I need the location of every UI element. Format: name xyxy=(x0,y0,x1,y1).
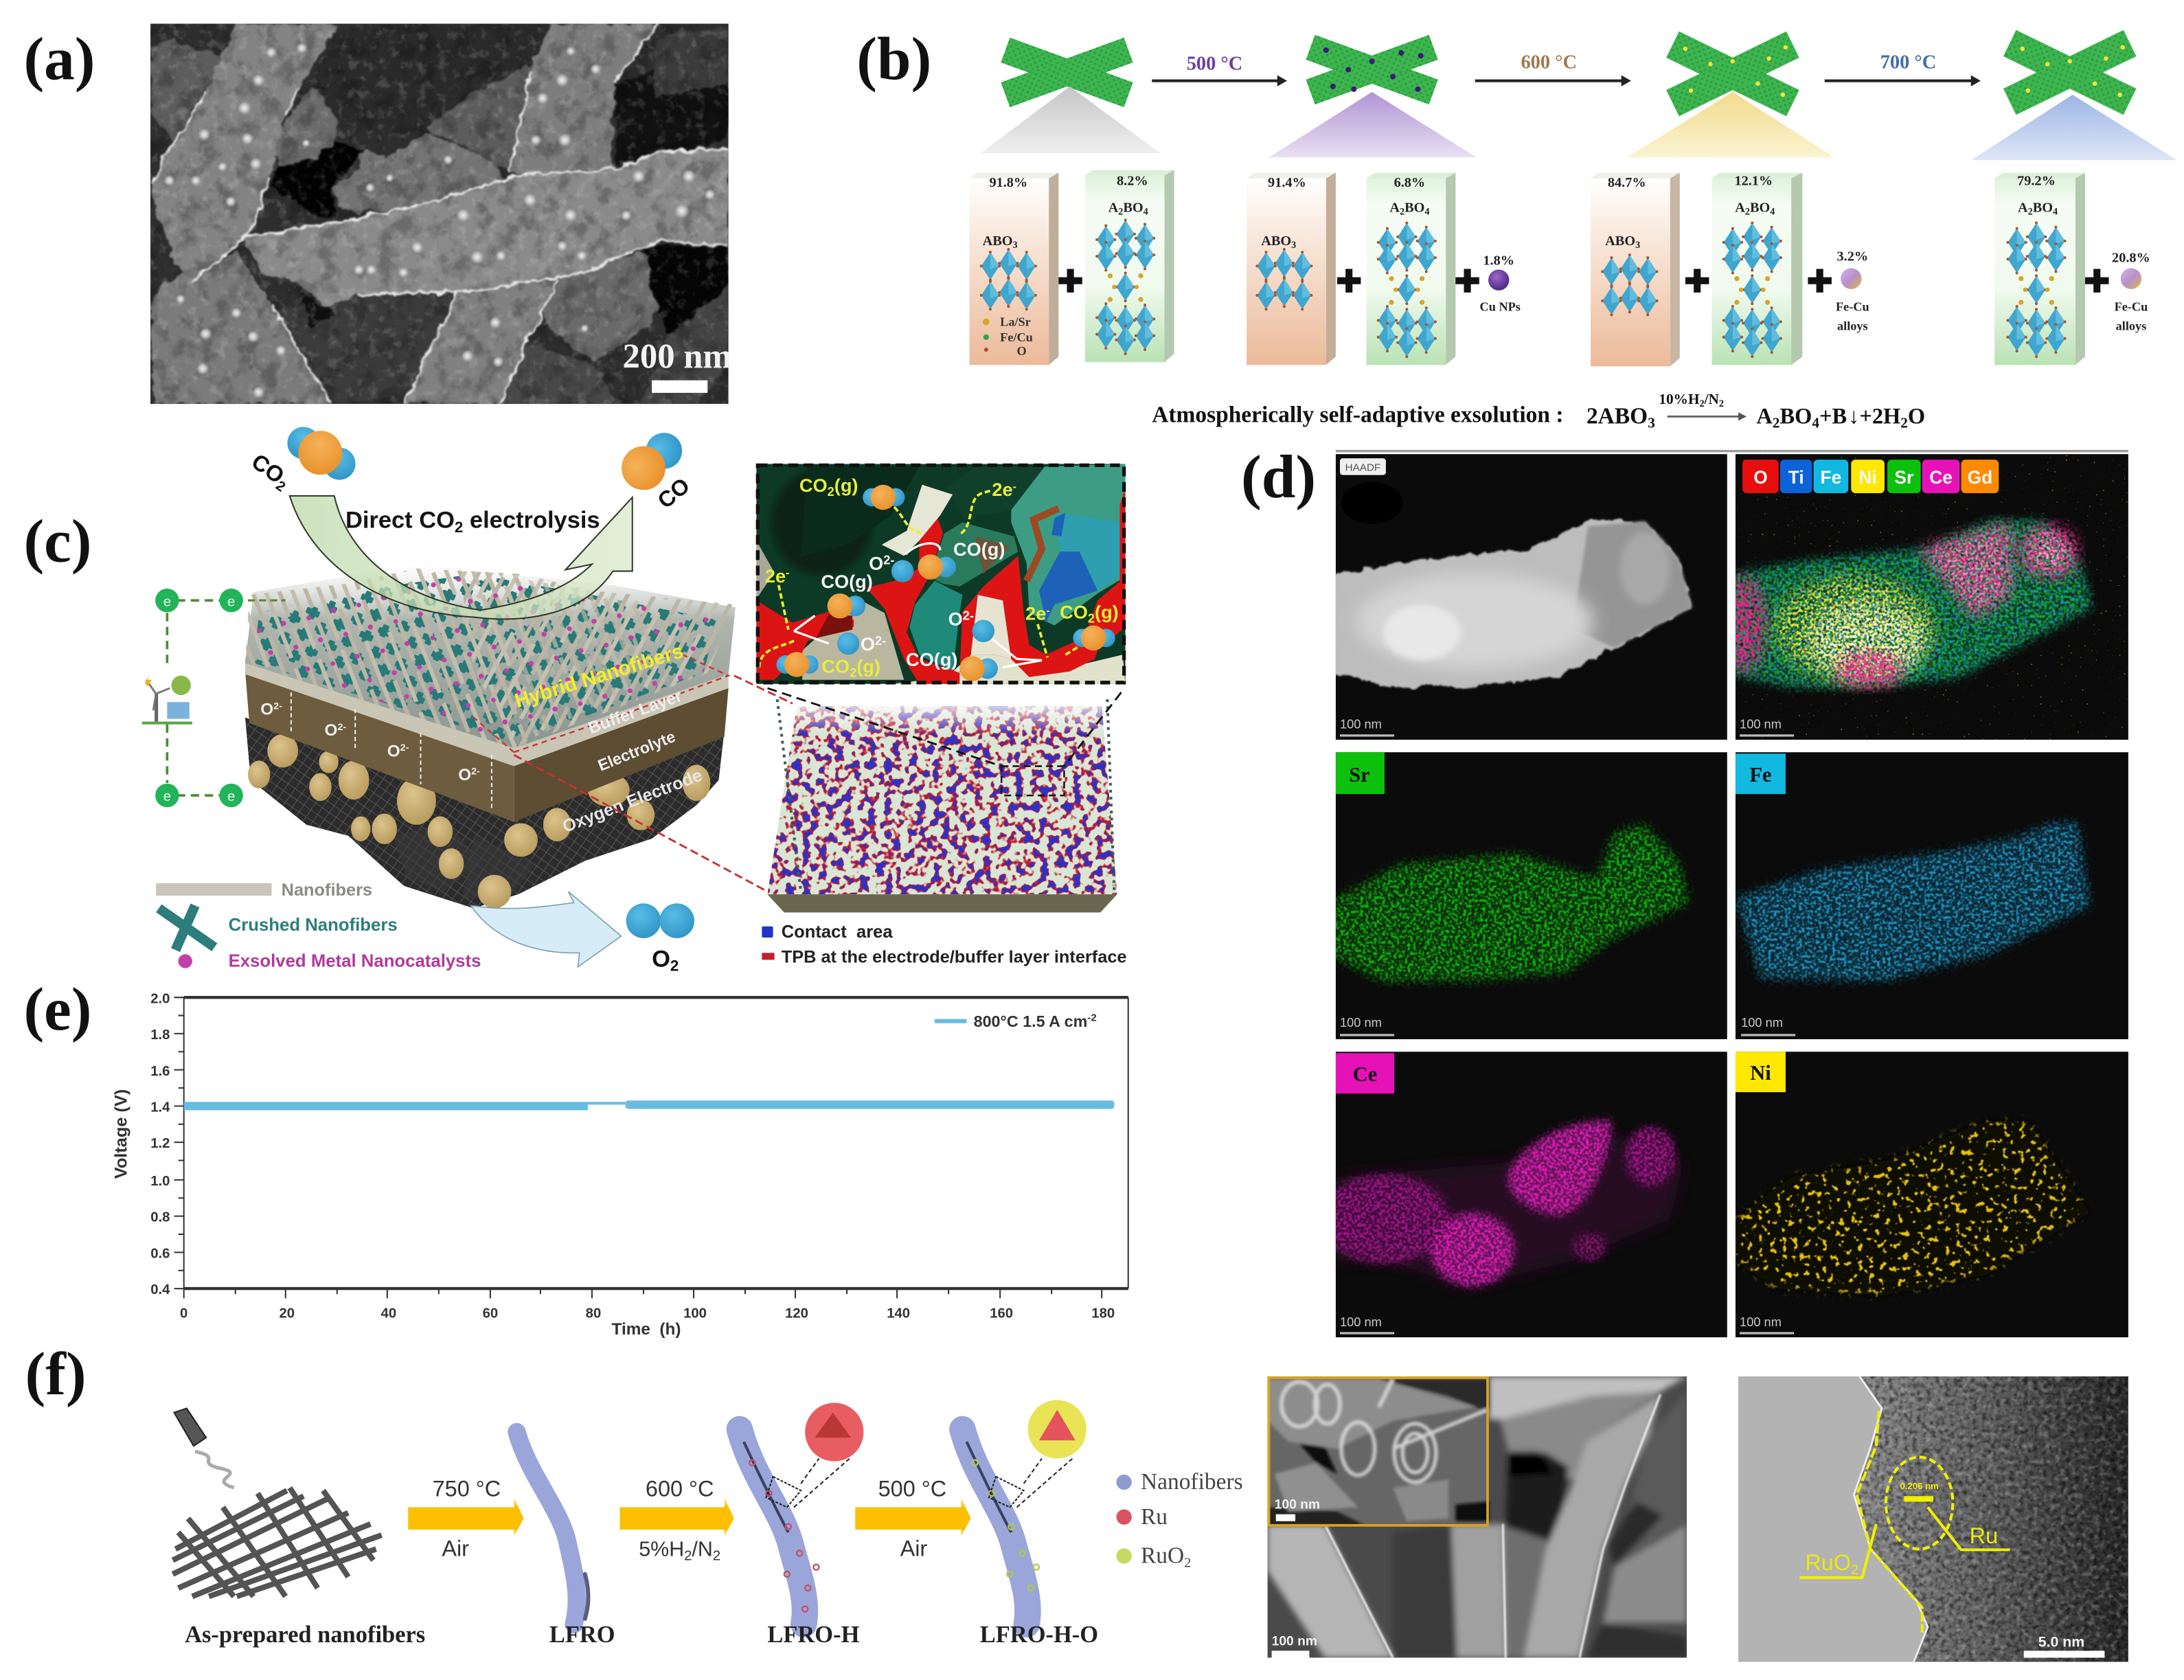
reaction labels: - xyxy=(786,567,789,580)
percentages and phase labels: 4 xyxy=(2053,206,2058,217)
triangle purple xyxy=(1269,92,1477,157)
percentages and phase labels: alloys xyxy=(1837,319,1868,333)
Fe map xyxy=(1736,752,2128,1039)
percentages and phase labels: BO xyxy=(2033,200,2053,215)
oxide ion labels and arrows: 2- xyxy=(273,701,282,712)
element chips xyxy=(1742,459,1999,493)
block ABO3 col1 xyxy=(970,172,1058,365)
Ru callout: Ru xyxy=(1970,1523,1998,1548)
sample names: LFRO-H-O xyxy=(980,1622,1098,1648)
y axis labels: 1.6 xyxy=(150,1064,170,1079)
Fe-Cu alloy particles xyxy=(1841,268,2141,289)
process arrow 750 xyxy=(408,1497,524,1536)
panel f: TEM image xyxy=(1738,1376,2128,1662)
percentages and phase labels: 4 xyxy=(1770,206,1775,217)
sample names: As-prepared nanofibers xyxy=(185,1622,425,1648)
y axis labels: 1.2 xyxy=(150,1136,170,1151)
panel b: thermal exsolution schematic xyxy=(970,30,2177,431)
oxide ion labels and arrows: O xyxy=(458,766,471,784)
legend RuO2: RuO xyxy=(1141,1543,1184,1569)
SEM scale bar xyxy=(1272,1650,1309,1658)
heading: direct CO2 electrolysis: 2 xyxy=(455,519,463,536)
exsolution equation xyxy=(1152,391,1925,431)
reaction labels: 2- xyxy=(963,609,974,623)
legend: triple phase boundary: TPB at the electrode/buffer layer interface xyxy=(782,947,1127,966)
panel e: voltage stability chart xyxy=(112,991,1128,1339)
nanofiber forest xyxy=(245,564,736,752)
scale labels and bars: 100 nm xyxy=(1340,1015,1382,1030)
percentages and phase labels: Cu NPs xyxy=(1480,299,1521,313)
scale labels and bars: 100 nm xyxy=(1340,717,1382,731)
percentages and phase labels: ABO xyxy=(1261,234,1291,249)
element chips: Sr xyxy=(1894,467,1913,488)
exsolution equation: ↓ xyxy=(1848,405,1859,429)
x axis labels: 40 xyxy=(381,1306,396,1321)
oxide ion labels and arrows: O xyxy=(387,742,400,760)
arrow 600 C xyxy=(1475,76,1631,87)
percentages and phase labels: BO xyxy=(1750,200,1770,215)
external circuit: e xyxy=(163,594,171,609)
lattice spacing: 0.206 nm xyxy=(1900,1481,1939,1491)
panel f: SEM image with inset xyxy=(1268,1376,1687,1658)
percentages and phase labels: 91.8% xyxy=(989,175,1027,190)
oxide ion labels and arrows xyxy=(260,692,492,809)
block A2BO4 col1 xyxy=(1085,170,1174,362)
fiber LFRO xyxy=(516,1432,588,1624)
SEM scale label: 100 nm xyxy=(1272,1634,1317,1648)
process conditions: /N xyxy=(692,1537,713,1560)
percentages and phase labels: 12.1% xyxy=(1734,174,1773,189)
percentages and phase labels: Fe-Cu xyxy=(2115,299,2148,313)
x axis labels: 160 xyxy=(990,1306,1013,1321)
scale bar xyxy=(652,381,707,393)
axes xyxy=(174,997,1128,1298)
Ce map: Ce xyxy=(1353,1063,1377,1086)
percentages and phase labels xyxy=(983,174,2150,333)
fiber cross 3 with yellow nanoparticles xyxy=(1666,32,1799,116)
element chips: O xyxy=(1753,467,1768,488)
x axis labels: 180 xyxy=(1091,1306,1115,1321)
exsolution equation: 10%H xyxy=(1659,391,1700,407)
percentages and phase labels: BO xyxy=(1123,200,1144,215)
molecules xyxy=(863,485,905,510)
Sr map: Sr xyxy=(1349,763,1370,786)
fiber cross 1 xyxy=(1001,38,1133,107)
sample names: LFRO-H xyxy=(767,1622,860,1648)
x axis title: Time (h) xyxy=(612,1320,681,1339)
Sr map xyxy=(1330,752,1727,1039)
legend: crushed nanofibers: Crushed Nanofibers xyxy=(229,916,398,935)
CO2 label: CO xyxy=(247,449,288,488)
icon: electrospinning syringe xyxy=(174,1409,234,1488)
legend Ru: Ru xyxy=(1141,1504,1168,1530)
sample names: LFRO xyxy=(549,1622,615,1648)
inset scale bar xyxy=(1276,1514,1295,1521)
reaction labels: O xyxy=(861,633,875,655)
CO label: CO xyxy=(653,473,694,513)
exsolution equation: BO xyxy=(1779,405,1812,429)
percentages and phase labels: A xyxy=(2018,200,2028,215)
white ion paths xyxy=(794,543,1042,668)
legend nanofibers: Nanofibers xyxy=(1141,1469,1243,1495)
percentages and phase labels: BO xyxy=(1404,200,1424,215)
swoosh arrow xyxy=(290,496,633,619)
HAADF image xyxy=(1330,454,1727,740)
legend: nanofibers xyxy=(156,881,372,900)
process conditions: 500 °C xyxy=(878,1476,946,1501)
CO2 molecule xyxy=(279,416,364,491)
panel c: CO2 electrolysis cell xyxy=(142,416,1127,975)
scale label: 200 nm xyxy=(623,337,732,375)
panel label: c: (c) xyxy=(23,507,92,575)
magnified RuO2 core-shell xyxy=(1016,1400,1087,1508)
icon: renewable power xyxy=(142,676,192,725)
triangle blue xyxy=(1971,95,2177,160)
reaction labels: - xyxy=(1046,604,1050,617)
arrow 700 C xyxy=(1825,76,1981,87)
Ce map xyxy=(1321,1052,1727,1337)
oxygen electrode label: Oxygen Electrode xyxy=(560,766,705,837)
element chips: Fe xyxy=(1821,467,1841,488)
process conditions xyxy=(433,1476,946,1564)
exsolution equation: 2 xyxy=(1773,415,1779,431)
buffer layer xyxy=(245,657,729,767)
heading: direct CO2 electrolysis: electrolysis xyxy=(463,508,600,534)
exsolution equation: 2ABO xyxy=(1586,404,1648,429)
block A2BO4 col3 xyxy=(1711,172,1802,365)
reaction labels: - xyxy=(1013,481,1016,493)
exsolution equation: +B xyxy=(1819,405,1847,429)
percentages and phase labels: 20.8% xyxy=(2112,250,2150,265)
oxide ion labels and arrows: O xyxy=(260,700,273,718)
fiber cross 4 with yellow nanoparticles xyxy=(2003,30,2137,115)
electrolyte label: Electrolyte xyxy=(595,727,678,775)
reaction labels: 2e xyxy=(765,565,786,587)
process arrow 500 xyxy=(855,1497,971,1536)
plus signs xyxy=(1058,269,2108,293)
RuO2 callout: 2 xyxy=(1851,1563,1858,1578)
HAADF chip xyxy=(1340,458,1386,475)
panel label: f: (f) xyxy=(25,1340,87,1408)
percentages and phase labels: 6.8% xyxy=(1394,175,1425,190)
y axis labels xyxy=(150,991,170,1297)
reaction labels: O xyxy=(948,609,963,630)
reaction labels: CO xyxy=(799,475,828,496)
exsolution equation: 2 xyxy=(1700,398,1705,409)
exsolution equation: 2 xyxy=(1719,398,1724,409)
block A2BO4 col2 xyxy=(1367,172,1455,365)
exsolution equation: A xyxy=(1756,405,1773,429)
y axis labels: 1.0 xyxy=(150,1174,170,1189)
percentages and phase labels: 8.2% xyxy=(1117,174,1148,189)
process conditions: 750 °C xyxy=(433,1476,501,1501)
Fe map: Fe xyxy=(1749,763,1772,786)
oxide ion labels and arrows: 2- xyxy=(337,722,346,733)
fiber cross 2 with purple nanoparticles xyxy=(1306,35,1438,104)
percentages and phase labels: Fe-Cu xyxy=(1836,299,1869,313)
percentages and phase labels: A xyxy=(1389,200,1400,215)
percentages and phase labels: 3.2% xyxy=(1837,249,1868,264)
reaction labels: 2- xyxy=(883,552,894,567)
oxide ion labels and arrows: O xyxy=(325,721,337,740)
reaction labels: 2 xyxy=(828,484,834,499)
exsolution equation: Atmospherically self-adaptive exsolution : xyxy=(1152,402,1564,428)
reaction labels: 2- xyxy=(875,633,886,648)
RuO2 callout xyxy=(1799,1524,1876,1578)
exsolution equation: +2H xyxy=(1859,405,1900,429)
RuO2 callout: RuO xyxy=(1805,1550,1851,1575)
panel label: e: (e) xyxy=(23,975,92,1043)
panel d: HAADF and EDS maps xyxy=(1321,454,2128,1337)
inset SEM xyxy=(1268,1376,1489,1525)
triangle yellow xyxy=(1627,92,1834,157)
exsolution equation: /N xyxy=(1704,391,1720,407)
label 700 C: 700 °C xyxy=(1880,52,1936,73)
percentages and phase labels: 4 xyxy=(1144,206,1148,217)
x axis labels: 0 xyxy=(180,1306,187,1321)
legend RuO2: 2 xyxy=(1184,1556,1191,1571)
O2 label: 2 xyxy=(670,957,679,975)
exsolution equation: 4 xyxy=(1812,415,1819,431)
y axis labels: 2.0 xyxy=(150,991,170,1006)
percentages and phase labels: 3 xyxy=(1013,240,1018,251)
legend xyxy=(935,1012,1097,1030)
y axis labels: 1.4 xyxy=(150,1100,170,1115)
fiber LFRO-H xyxy=(740,1429,819,1624)
reaction labels: CO xyxy=(1060,602,1088,623)
element chips: Ti xyxy=(1788,467,1804,488)
fiber LFRO-H-O xyxy=(962,1429,1039,1624)
percentages and phase labels: 2 xyxy=(1400,206,1404,217)
element chips: Ni xyxy=(1858,467,1877,488)
legend: crushed nanofibers xyxy=(159,905,398,950)
scale labels and bars: 100 nm xyxy=(1741,1015,1783,1030)
reaction labels: O xyxy=(869,553,883,574)
percentages and phase labels: ABO xyxy=(983,234,1013,249)
process conditions: Air xyxy=(900,1536,927,1560)
element chips: Gd xyxy=(1968,467,1992,488)
redaction blob xyxy=(1341,482,1402,524)
percentages and phase labels: 2 xyxy=(2028,206,2033,217)
yellow electron and gas paths xyxy=(759,490,1084,669)
interface map xyxy=(767,699,1119,912)
electrode particles xyxy=(245,718,725,908)
atom legend: Fe/Cu xyxy=(1000,330,1033,344)
composite EDS map xyxy=(1722,454,2128,740)
panel label: d: (d) xyxy=(1241,443,1316,511)
label 600 C: 600 °C xyxy=(1521,52,1577,73)
CO molecule xyxy=(613,422,692,499)
y axis labels: 0.8 xyxy=(150,1210,170,1225)
scale labels and bars xyxy=(1340,717,1795,1333)
external circuit: e xyxy=(227,594,235,609)
TEM scale label: 5.0 nm xyxy=(2038,1633,2084,1650)
y axis title: Voltage (V) xyxy=(112,1089,131,1179)
external circuit: e xyxy=(227,789,235,804)
percentages and phase labels: 79.2% xyxy=(2017,174,2056,189)
inset: triple phase boundary close-up xyxy=(756,464,1126,684)
scale labels and bars: 100 nm xyxy=(1340,1315,1382,1329)
percentages and phase labels: alloys xyxy=(2116,319,2146,333)
O2 arrow xyxy=(470,892,622,967)
reaction labels: 2 xyxy=(1088,611,1095,626)
percentages and phase labels: 3 xyxy=(1635,240,1640,251)
panel a: SEM micrograph of nanofibers xyxy=(150,19,732,404)
Ru particle outline xyxy=(1886,1457,1953,1549)
arrow 500 C xyxy=(1152,76,1287,87)
percentages and phase labels: A xyxy=(1108,200,1118,215)
Ni map xyxy=(1736,1052,2128,1337)
Cu nanoparticle xyxy=(1488,269,1509,291)
Ni map: Ni xyxy=(1750,1061,1771,1085)
buffer layer label: Buffer Layer xyxy=(586,687,685,738)
block A2BO4 col4 xyxy=(1994,172,2085,365)
zoom guide lines xyxy=(514,676,1122,892)
exsolution equation: 3 xyxy=(1648,415,1655,431)
legend: exsolved metal nanocatalysts: Exsolved Metal Nanocatalysts xyxy=(229,952,481,971)
electrolyte left face xyxy=(245,670,514,822)
y axis labels: 0.6 xyxy=(150,1246,170,1261)
y axis labels: 0.4 xyxy=(150,1282,170,1297)
x axis labels: 60 xyxy=(483,1306,498,1321)
nanofiber mesh xyxy=(172,1488,382,1596)
x axis labels: 20 xyxy=(280,1306,295,1321)
reaction labels: 2e xyxy=(1025,603,1046,624)
percentages and phase labels: 4 xyxy=(1424,206,1429,217)
label 500 C: 500 °C xyxy=(1187,53,1242,74)
exsolution equation: 2 xyxy=(1900,415,1908,431)
reaction labels: (g) xyxy=(856,656,880,677)
reaction labels: CO xyxy=(821,656,850,677)
magnified Ru particle xyxy=(794,1403,863,1508)
reaction labels: CO(g) xyxy=(906,648,957,670)
lattice spacing xyxy=(1900,1481,1939,1501)
reaction labels: 2 xyxy=(850,666,856,680)
legend RuO2 xyxy=(1116,1543,1191,1571)
percentages and phase labels: A xyxy=(1735,200,1745,215)
percentages and phase labels: 2 xyxy=(1118,206,1123,217)
panel label: a: (a) xyxy=(23,25,95,93)
HAADF chip: HAADF xyxy=(1345,462,1380,474)
Ru callout xyxy=(1928,1508,2010,1550)
block ABO3 col3 xyxy=(1591,172,1680,366)
reaction labels xyxy=(765,475,1119,680)
panel label: b: (b) xyxy=(856,25,931,93)
block ABO3 col2 xyxy=(1247,172,1336,365)
legend: nanofibers: Nanofibers xyxy=(282,881,372,900)
external circuit xyxy=(155,589,243,807)
inset scale label: 100 nm xyxy=(1275,1498,1320,1512)
legend: -2 xyxy=(1087,1012,1097,1024)
percentages and phase labels: 3 xyxy=(1291,240,1296,251)
percentages and phase labels: 91.4% xyxy=(1268,175,1306,190)
process arrow 600 xyxy=(619,1497,734,1536)
percentages and phase labels: 2 xyxy=(1745,206,1750,217)
reaction labels: (g) xyxy=(834,475,858,496)
legend Ru xyxy=(1116,1504,1168,1530)
O2 label: O xyxy=(652,946,670,973)
atom legend: La/Sr xyxy=(1000,315,1031,329)
rule above panel d xyxy=(1336,450,2128,452)
percentages and phase labels: ABO xyxy=(1605,234,1635,249)
exsolution equation: O xyxy=(1908,405,1925,429)
process conditions: Air xyxy=(442,1536,469,1560)
reaction labels: CO(g) xyxy=(821,571,873,592)
process conditions: 2 xyxy=(713,1549,720,1564)
process conditions: 5%H xyxy=(639,1537,684,1560)
element chips: Ce xyxy=(1929,467,1953,488)
x axis labels: 140 xyxy=(887,1306,910,1321)
O2 molecule xyxy=(626,903,694,938)
oxide ion labels and arrows: 2- xyxy=(471,767,480,777)
y axis labels: 1.8 xyxy=(150,1028,170,1043)
legend: contact area: Contact area xyxy=(782,922,893,942)
scale labels and bars: 100 nm xyxy=(1740,1315,1782,1329)
electrolyte right face xyxy=(514,688,729,822)
process conditions: 600 °C xyxy=(646,1476,714,1501)
reaction labels: 2e xyxy=(992,479,1013,500)
percentages and phase labels: 84.7% xyxy=(1608,175,1646,190)
x axis labels: 100 xyxy=(683,1306,707,1321)
reaction labels: (g) xyxy=(1095,602,1119,623)
x axis labels: 80 xyxy=(586,1306,601,1321)
panel f: synthesis schematic xyxy=(172,1400,1243,1648)
heading: direct CO2 electrolysis: Direct CO xyxy=(345,508,455,534)
percentages and phase labels: 1.8% xyxy=(1483,253,1514,268)
scale labels and bars: 100 nm xyxy=(1740,717,1782,731)
reaction labels: CO(g) xyxy=(953,538,1005,560)
legend: 800°C 1.5 A cm xyxy=(974,1012,1087,1030)
TEM scale bar xyxy=(2024,1650,2104,1658)
atom legend xyxy=(983,315,1033,358)
oxide ion labels and arrows: 2- xyxy=(400,742,409,753)
voltage trace xyxy=(184,1100,1114,1110)
atom legend: O xyxy=(1016,344,1027,358)
external circuit: e xyxy=(163,789,171,804)
x axis labels xyxy=(180,1306,1115,1321)
process conditions: 2 xyxy=(684,1549,692,1564)
triangle grey xyxy=(981,87,1160,153)
arrow into cell xyxy=(248,600,286,601)
x axis labels: 120 xyxy=(785,1306,808,1321)
CO2 label: 2 xyxy=(273,478,288,495)
hybrid nanofibers label: Hybrid Nanofibers xyxy=(512,639,686,712)
sample names xyxy=(185,1622,1098,1648)
RuO2 boundary xyxy=(1856,1411,1922,1633)
